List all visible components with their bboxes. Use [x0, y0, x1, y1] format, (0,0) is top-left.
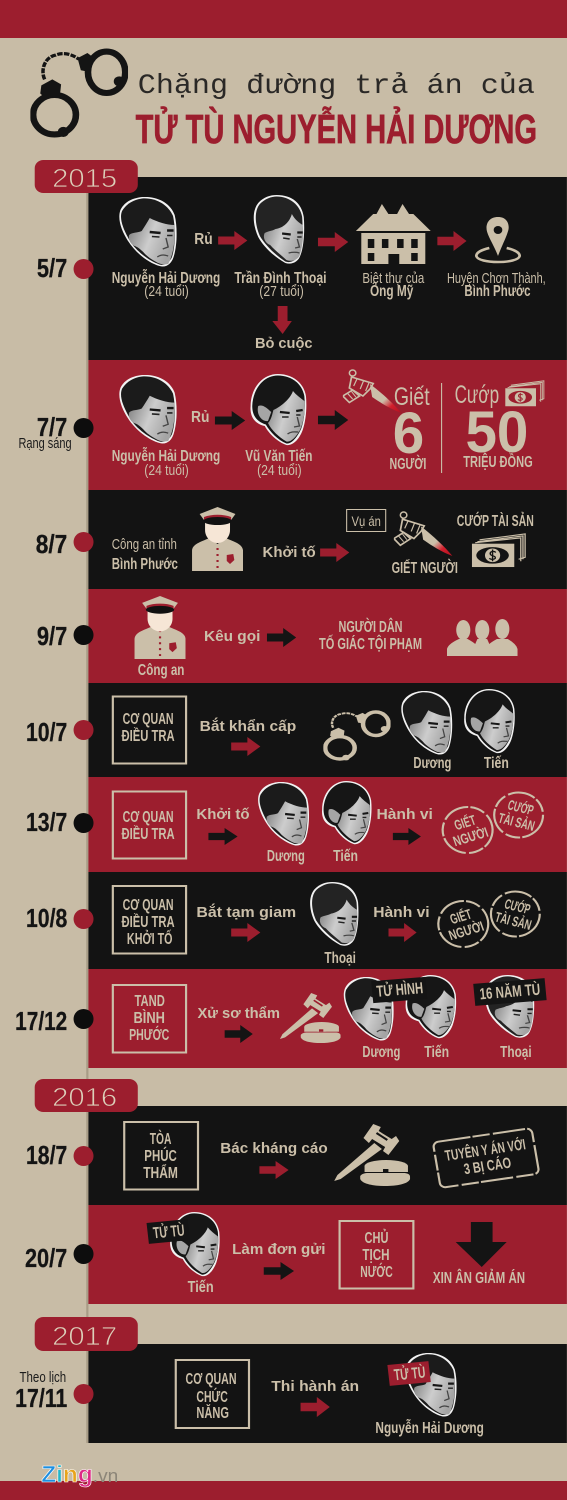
- box: agency: [113, 696, 186, 764]
- label: Khởi tố: Khởi tố: [196, 807, 250, 823]
- arrow: [215, 411, 245, 430]
- labels: names: Tiến: [484, 754, 509, 772]
- box: appeal court: THẨM: [143, 1164, 178, 1182]
- icon: police: [135, 596, 186, 659]
- box: agency: [113, 792, 186, 858]
- label: police: Công an tỉnh: [112, 537, 177, 553]
- arrow: [318, 232, 348, 252]
- labels: names: Thoại: [500, 1043, 532, 1061]
- date: 20/7: 20/7: [25, 1243, 67, 1273]
- caption: Thoại: Trần Đình Thoại: [234, 269, 327, 287]
- box: president: TỊCH: [362, 1246, 390, 1264]
- date: 7/7: [18, 412, 94, 452]
- stamp: murder: [432, 895, 495, 953]
- text: people report: TỐ GIÁC TỘI PHẠM: [319, 634, 422, 653]
- panel: 17/11: [88, 1344, 567, 1443]
- caption: Thoại: [234, 269, 327, 300]
- arrow: [301, 1397, 330, 1417]
- box: authorities: NĂNG: [196, 1404, 229, 1422]
- arrow: [208, 828, 238, 845]
- box: authorities: CƠ QUAN: [186, 1370, 237, 1388]
- face: Dương: [344, 977, 394, 1041]
- arrow: [320, 543, 349, 562]
- stamp: murder: NGƯỜI: [451, 823, 490, 850]
- face: Tiến: [170, 1212, 220, 1276]
- box: agency: CƠ QUAN: [123, 896, 174, 914]
- subtitle: Chặng đường trả án của: [138, 70, 535, 102]
- box: agency: [113, 886, 186, 954]
- icon: handcuffs: [33, 52, 125, 137]
- caption: villa: Biệt thự của: [362, 271, 424, 287]
- tag: Vụ án: [347, 510, 386, 532]
- face: Dương: [119, 197, 177, 267]
- box: court: PHƯỚC: [129, 1026, 169, 1044]
- box: president: NƯỚC: [360, 1263, 393, 1281]
- panel: 10/8: [88, 872, 567, 969]
- icon: people: [447, 619, 518, 656]
- labels: names: [267, 847, 358, 865]
- arrow: [218, 231, 247, 250]
- box: agency: KHỞI TỐ: [127, 929, 173, 948]
- face: Thoại: [254, 195, 304, 264]
- tag: Vụ án: Vụ án: [352, 514, 381, 530]
- tab: 2017: [35, 1317, 138, 1351]
- label: first instance: Xử sơ thẩm: [197, 1005, 280, 1022]
- face: Dương: [406, 1353, 457, 1417]
- labels: names: Tiến: [424, 1043, 449, 1061]
- date: 17/11: [15, 1370, 94, 1413]
- stamp: robbery: TÀI SẢN: [493, 909, 533, 934]
- panel: 13/7: [88, 777, 567, 872]
- box: court: BÌNH: [133, 1009, 165, 1027]
- icon: money: [472, 534, 525, 567]
- box: agency: CƠ QUAN: [123, 808, 174, 826]
- label: police: [112, 537, 178, 573]
- face: Dương: [258, 782, 309, 846]
- stat: robbed: [455, 380, 533, 471]
- stat: killed: [390, 382, 430, 473]
- date: 9/7: [37, 621, 94, 651]
- caption: Tiến: Vũ Văn Tiến: [245, 447, 312, 465]
- bottom band: [0, 1481, 567, 1500]
- stamp: robbery: TÀI SẢN: [496, 810, 537, 835]
- labels: names: Dương: [413, 754, 451, 772]
- caption: Dương: Nguyễn Hải Dương: [112, 269, 220, 287]
- date: 10/8: 10/8: [26, 903, 67, 933]
- label: detention: Bắt tạm giam: [196, 903, 296, 921]
- tag: death row: TỬ TÙ: [152, 1221, 185, 1242]
- icon: gavel: [280, 993, 341, 1043]
- label: petition: Làm đơn gửi: [232, 1242, 325, 1258]
- arrow: [437, 231, 467, 251]
- box: court: TAND: [135, 992, 165, 1010]
- date: 18/7: 18/7: [26, 1140, 67, 1170]
- date: 13/7: 13/7: [26, 807, 67, 837]
- icon: gavel: [334, 1124, 410, 1186]
- stamp: robbery: CƯỚP: [503, 895, 533, 918]
- label: Hành vi: Hành vi: [373, 905, 430, 921]
- face: Dương: [401, 691, 452, 755]
- label: Hành vi: Hành vi: [376, 807, 433, 823]
- stamp: murder: GIẾT: [448, 906, 474, 928]
- date: 17/11: 17/11: [15, 1383, 67, 1413]
- box: court: [113, 985, 186, 1052]
- caption: villa: Ông Mỹ: [370, 282, 414, 300]
- face: Dương: [119, 375, 177, 444]
- arrow: [231, 737, 260, 756]
- stamp: upheld: [433, 1128, 539, 1188]
- date: 7/7: Rạng sáng: [18, 436, 72, 452]
- face: Tiến: [322, 781, 372, 844]
- label: Khởi tố: Khởi tố: [263, 545, 316, 561]
- face: Tiến: [464, 689, 515, 753]
- box: appeal court: PHÚC: [144, 1147, 177, 1165]
- tab: 2015: [35, 160, 138, 193]
- label: appeal rejected: Bác kháng cáo: [220, 1141, 328, 1157]
- date: 5/7: 5/7: [37, 253, 67, 283]
- caption: Dương: (24 tuổi): [144, 283, 189, 300]
- icon: villa: [356, 204, 431, 264]
- arrow down: [272, 306, 292, 334]
- box: agency: ĐIỀU TRA: [122, 825, 175, 843]
- top band: [0, 0, 567, 38]
- caption: Dương: (24 tuổi): [144, 462, 189, 479]
- label: Thoại: Thoại: [324, 949, 356, 967]
- date: 8/7: 8/7: [36, 529, 67, 559]
- icon: police: [192, 507, 243, 571]
- face: Tiến: [251, 374, 306, 445]
- date: 5/7: [37, 253, 94, 283]
- label: Bỏ cuộc: Bỏ cuộc: [255, 336, 313, 352]
- stamp: robbery: CƯỚP: [506, 796, 536, 819]
- arrow: [388, 923, 417, 942]
- text: people report: [319, 618, 422, 653]
- stamp: murder: GIẾT: [452, 812, 478, 834]
- tag: death row: TỬ TÙ: [393, 1363, 426, 1384]
- divider: [441, 383, 442, 473]
- box: president: CHỦ: [365, 1229, 388, 1247]
- date: 17/12: 17/12: [15, 1006, 67, 1036]
- tag: death row: [147, 1219, 190, 1244]
- stamp: robbery: [485, 886, 545, 942]
- labels: names: Tiến: [333, 847, 358, 865]
- caption: Dương: [112, 447, 220, 479]
- box: president: [340, 1221, 413, 1288]
- icon: knife: [394, 512, 452, 556]
- logo: Zing.vn: Zing.vn: [41, 1462, 118, 1488]
- arrow: [393, 828, 421, 845]
- stat: killed: Giết: [394, 382, 430, 411]
- arrow: [259, 1161, 289, 1179]
- tab: 2015: 2015: [52, 163, 117, 193]
- stat: robbed: Cướp: [455, 380, 499, 409]
- tag: 16 years: [473, 978, 547, 1006]
- label: urgent arrest: Bắt khẩn cấp: [200, 717, 296, 735]
- face: Thoại: [310, 882, 358, 946]
- caption: Tiến: [245, 447, 312, 479]
- panel: 10/7: [88, 683, 567, 777]
- panel: 17/12: [88, 969, 567, 1068]
- label: name: Nguyễn Hải Dương: [375, 1419, 484, 1437]
- box: appeal court: TÒA: [150, 1130, 171, 1148]
- arrow: [264, 1262, 294, 1280]
- panel: 20/7: [88, 1205, 567, 1304]
- tag: death sentence: [371, 977, 427, 1003]
- tag: death row: [387, 1361, 431, 1386]
- labels: names: [362, 1043, 532, 1061]
- label: murder: GIẾT NGƯỜI: [392, 559, 458, 577]
- stamp: murder: [436, 801, 499, 859]
- date: 17/11: Theo lịch: [20, 1370, 66, 1386]
- caption: Dương: Nguyễn Hải Dương: [112, 447, 220, 465]
- panel: 5/7: [88, 177, 567, 360]
- tab: 2016: 2016: [52, 1082, 117, 1112]
- icon: handcuffs: [325, 712, 389, 760]
- arrow: [231, 923, 260, 942]
- panel: 9/7: [88, 589, 567, 683]
- box: authorities: CHỨC: [196, 1388, 228, 1406]
- caption: Tiến: (24 tuổi): [257, 462, 302, 479]
- stamp: robbery: [489, 787, 549, 843]
- box: authorities: [176, 1360, 249, 1428]
- labels: names: [413, 754, 509, 772]
- caption: location: [447, 271, 546, 300]
- title: [136, 70, 537, 153]
- box: agency: ĐIỀU TRA: [122, 913, 175, 931]
- icon: money: [505, 381, 544, 406]
- panel: 18/7: [88, 1106, 567, 1205]
- labels: names: Dương: [362, 1043, 400, 1061]
- label: execute: Thi hành án: [271, 1379, 359, 1395]
- date: 7/7: 7/7: [37, 412, 67, 442]
- timeline line: [86, 190, 88, 1443]
- text: people report: NGƯỜI DÂN: [339, 618, 403, 636]
- box: agency: ĐIỀU TRA: [122, 727, 175, 745]
- label: Rủ: Rủ: [191, 408, 209, 426]
- caption: Dương: [112, 269, 220, 300]
- stat: robbed: 50: [465, 399, 528, 464]
- panel: 7/7: [88, 360, 567, 490]
- label: Rủ: Rủ: [194, 230, 213, 248]
- tab: 2016: [35, 1079, 138, 1112]
- arrow: [267, 628, 296, 647]
- stat: killed: 6: [393, 400, 424, 465]
- arrow: [318, 410, 348, 430]
- box: appeal court: [124, 1122, 198, 1190]
- panel: 8/7: [88, 490, 567, 589]
- label: Công an: Công an: [138, 661, 184, 679]
- arrow down: [456, 1222, 507, 1267]
- label: police: Bình Phước: [112, 555, 178, 573]
- caption: location: Bình Phước: [464, 282, 531, 300]
- stamp: murder: NGƯỜI: [446, 917, 486, 944]
- stamp: upheld: 3 BỊ CÁO: [462, 1153, 512, 1178]
- box: agency: CƠ QUAN: [123, 710, 174, 728]
- label: Kêu gọi: Kêu gọi: [204, 629, 260, 645]
- icon: map pin: [476, 217, 520, 262]
- labels: names: Dương: [267, 847, 305, 865]
- face: Thoại: [485, 975, 534, 1038]
- date: 10/7: 10/7: [26, 717, 67, 747]
- icon: knife: [343, 370, 401, 413]
- arrow: [225, 1025, 253, 1043]
- label: Tiến: Tiến: [188, 1278, 214, 1296]
- date: 9/7: 9/7: [37, 621, 67, 651]
- tab: 2017: 2017: [52, 1321, 117, 1351]
- caption: Thoại: (27 tuổi): [259, 283, 304, 300]
- caption: villa: [362, 271, 424, 300]
- tag: death sentence: TỬ HÌNH: [376, 979, 424, 1001]
- face: Tiến: [406, 975, 456, 1038]
- date: 8/7: [36, 529, 94, 559]
- stat: killed: NGƯỜI: [390, 455, 426, 473]
